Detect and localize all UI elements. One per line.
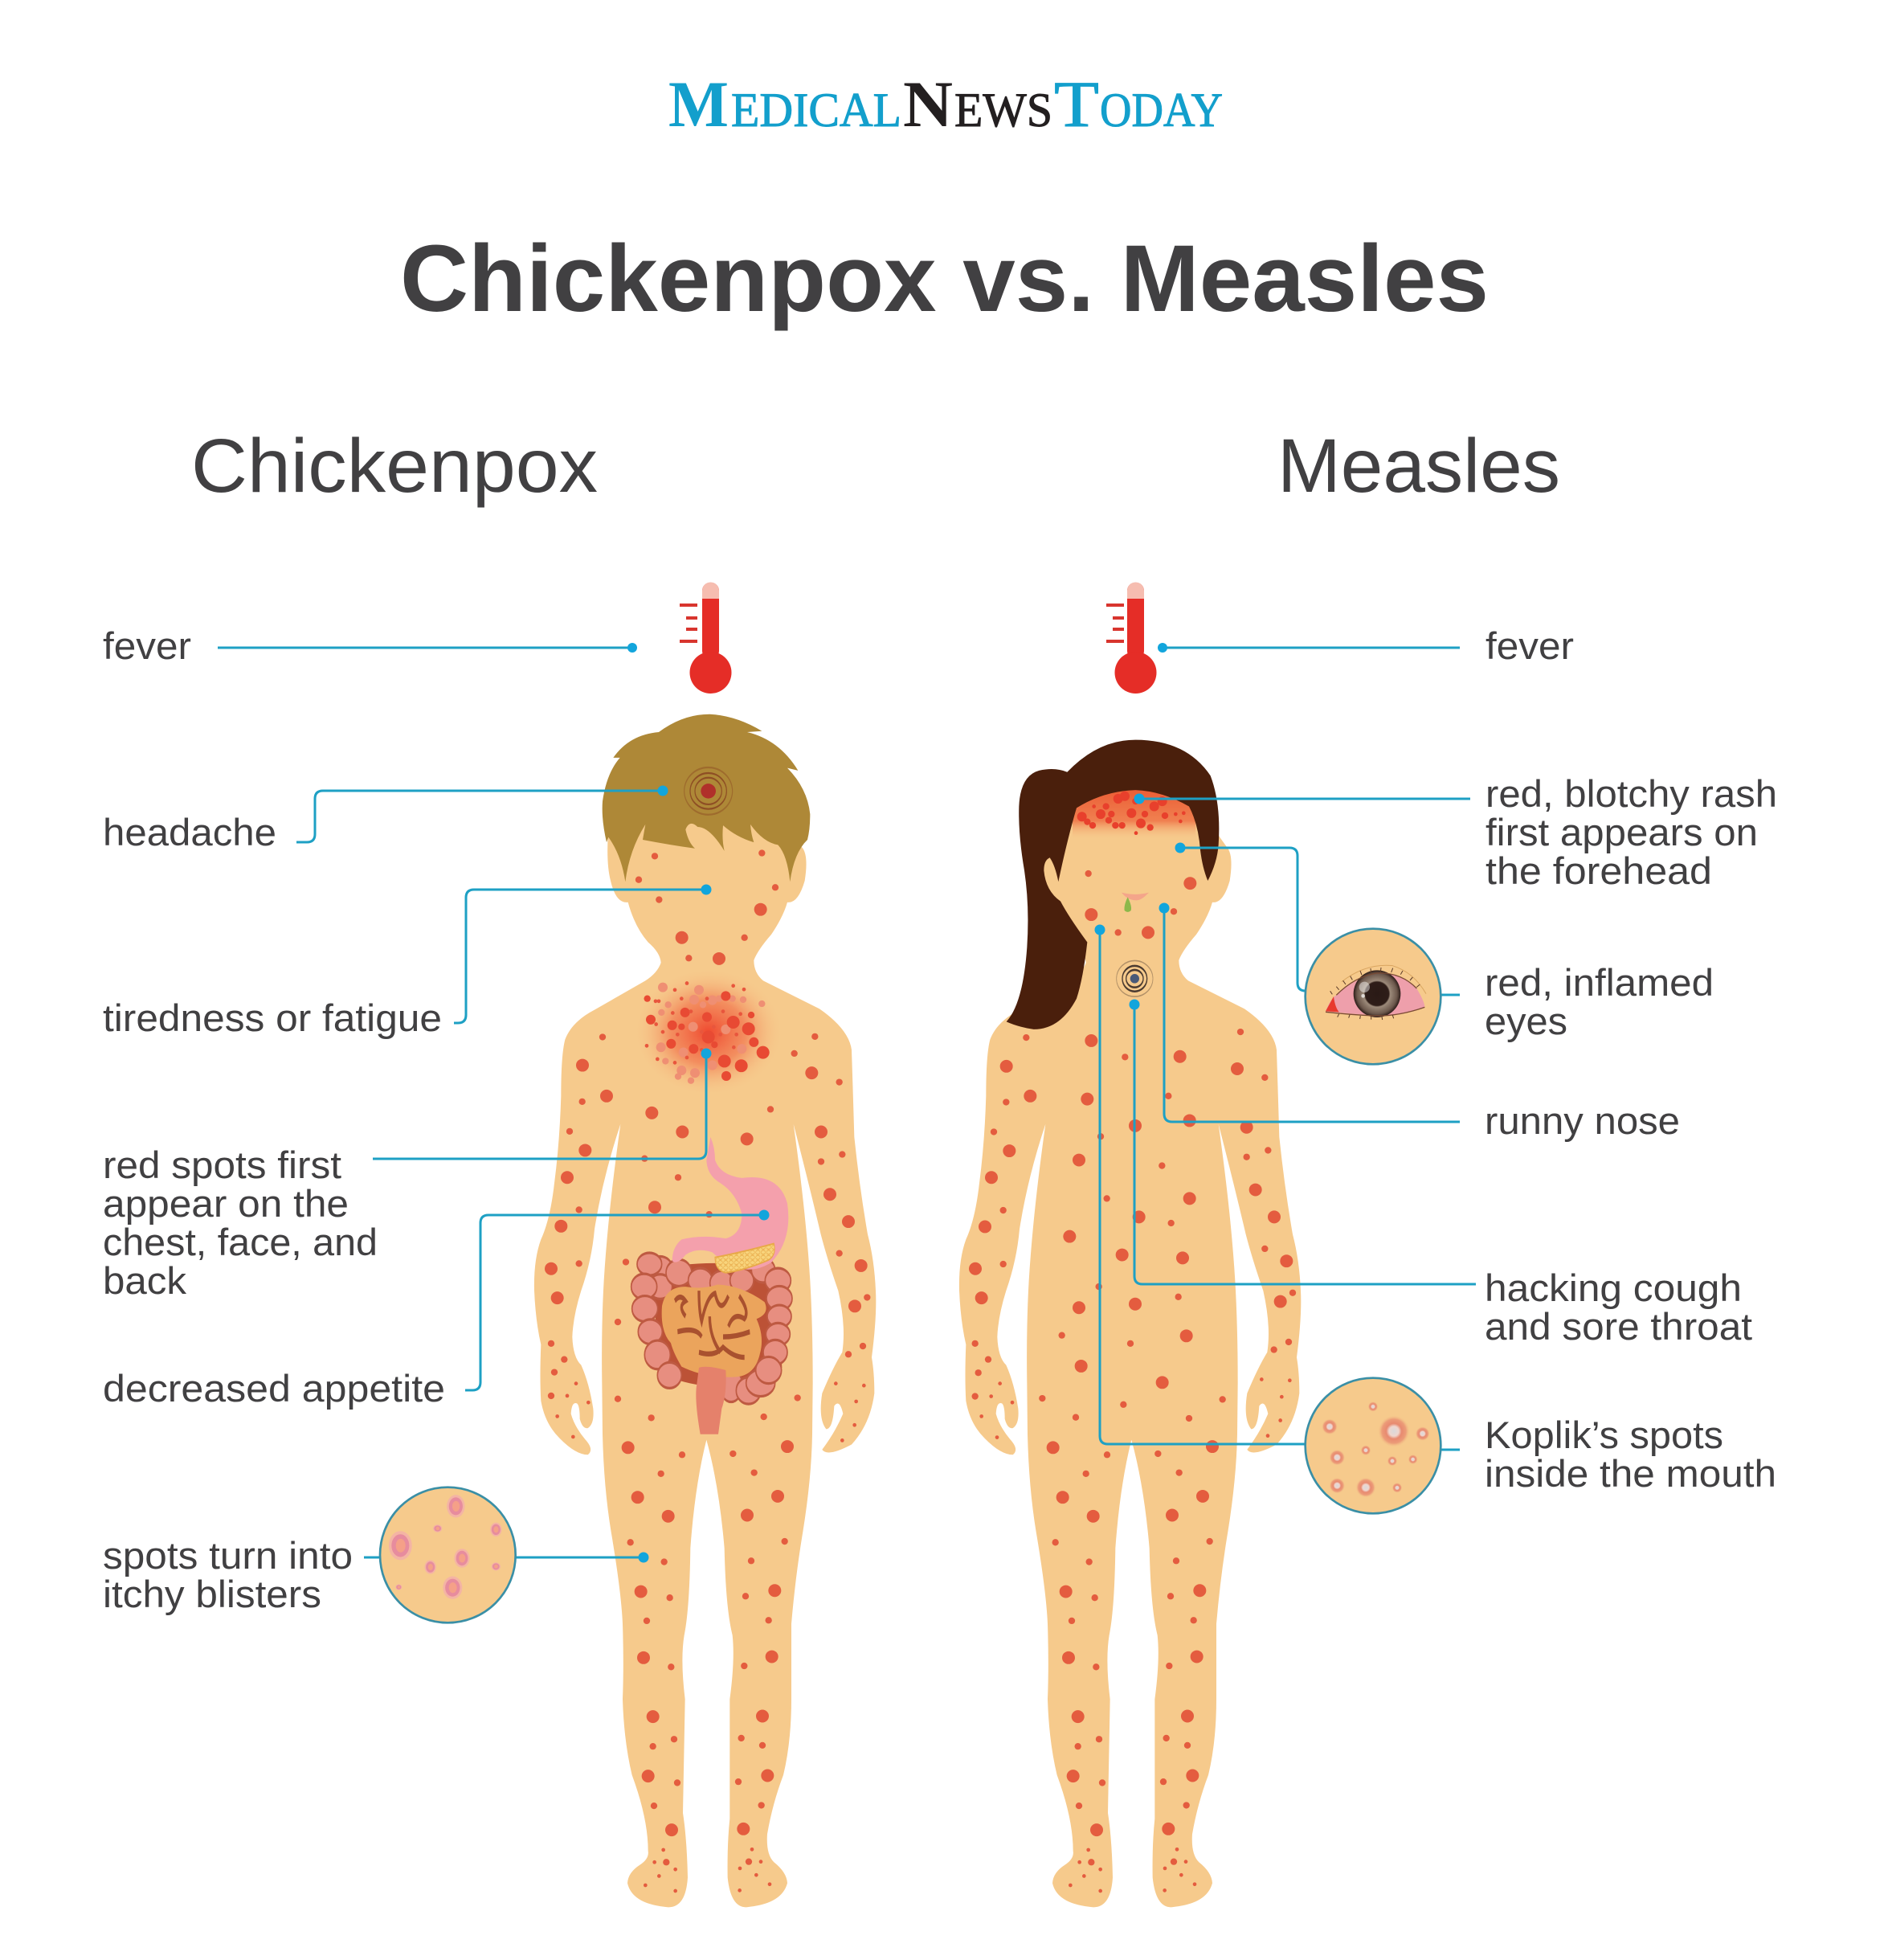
- leader: blisters: [364, 1553, 649, 1562]
- girl hair: [1007, 740, 1219, 1029]
- label: inflamed eyes: eyes: [1485, 1000, 1567, 1042]
- icon: thermometer left: [680, 582, 731, 694]
- label: red spots: back: [103, 1259, 187, 1302]
- label: forehead rash: the forehead: [1485, 849, 1712, 892]
- leader: koplik: [1094, 924, 1460, 1450]
- callout: eye magnifier: [1306, 929, 1441, 1064]
- label: red spots: appear on the: [103, 1182, 349, 1225]
- logo: N: [903, 68, 953, 141]
- label: blisters: [103, 1534, 353, 1615]
- leaders: measles: [1094, 643, 1476, 1450]
- forehead rash: [1073, 786, 1195, 840]
- boy hair: [603, 714, 810, 882]
- small intestine: [662, 1285, 766, 1377]
- label: cough: [1485, 1266, 1752, 1348]
- leader: red spots: [373, 1048, 712, 1159]
- leader: runny nose: [1159, 903, 1460, 1122]
- label: red spots: [103, 1144, 378, 1302]
- label: forehead rash: [1485, 772, 1777, 892]
- leader: eyes: [1175, 842, 1460, 995]
- large intestine: [631, 1253, 792, 1404]
- leader: fever left: [218, 643, 637, 653]
- label: inflamed eyes: red, inflamed: [1485, 961, 1714, 1004]
- headache rings: [685, 767, 733, 815]
- logo: EDICAL: [731, 84, 901, 137]
- leader: headache: [296, 786, 668, 842]
- stomach: [672, 1137, 788, 1270]
- leader: decreased appetite: [465, 1210, 770, 1390]
- leader: fever right: [1158, 643, 1460, 653]
- logo: ODAY: [1100, 84, 1223, 137]
- leaders: chickenpox: [218, 643, 770, 1562]
- label: blisters: itchy blisters: [103, 1573, 321, 1615]
- figure: girl with measles: [959, 740, 1301, 1907]
- label: blisters: spots turn into: [103, 1534, 353, 1577]
- heading: Measles: Measles: [1277, 424, 1560, 509]
- leader: cough: [1130, 1000, 1476, 1284]
- logo: T: [1054, 68, 1099, 141]
- title: Chickenpox vs. Measles: [400, 226, 1489, 332]
- leader: forehead rash: [1134, 794, 1470, 804]
- label: koplik: inside the mouth: [1485, 1452, 1776, 1495]
- label: headache: headache: [103, 811, 276, 853]
- callout: Koplik's spots magnifier: [1306, 1378, 1441, 1513]
- pancreas: [715, 1244, 774, 1273]
- label: koplik: [1485, 1414, 1776, 1495]
- rectum: [696, 1367, 726, 1434]
- boy skin spots: [545, 849, 870, 1892]
- icon: thermometer right: [1106, 582, 1157, 694]
- label: cough: hacking cough: [1485, 1266, 1742, 1309]
- logo: [668, 68, 1223, 141]
- leader: tiredness: [454, 884, 712, 1023]
- callout: blisters magnifier: [380, 1487, 516, 1622]
- chest rash: [633, 968, 783, 1096]
- runny nose drop: [1124, 897, 1131, 912]
- figure: boy with chickenpox: [534, 714, 876, 1907]
- label: forehead rash: first appears on: [1485, 811, 1758, 853]
- label: forehead rash: red, blotchy rash: [1485, 772, 1777, 815]
- label: red spots: chest, face, and: [103, 1221, 378, 1263]
- girl skin spots: [969, 870, 1296, 1892]
- label: fever right: fever: [1485, 624, 1574, 667]
- logo: EWS: [954, 84, 1052, 137]
- label: red spots: red spots first: [103, 1144, 341, 1186]
- label: cough: and sore throat: [1485, 1305, 1752, 1348]
- labels: measles symptoms: [1485, 624, 1777, 1495]
- sore throat rings: [1117, 960, 1153, 996]
- label: inflamed eyes: [1485, 961, 1714, 1042]
- label: koplik: Koplik’s spots: [1485, 1414, 1723, 1456]
- labels: chickenpox symptoms: [103, 624, 445, 1615]
- heading: Chickenpox: Chickenpox: [191, 424, 598, 509]
- label: tiredness: tiredness or fatigue: [103, 996, 442, 1039]
- label: fever: fever: [103, 624, 191, 667]
- label: decreased appetite: decreased appetite: [103, 1367, 445, 1410]
- logo: M: [668, 68, 729, 141]
- mouth: [1122, 893, 1149, 900]
- label: runny nose: runny nose: [1485, 1099, 1680, 1142]
